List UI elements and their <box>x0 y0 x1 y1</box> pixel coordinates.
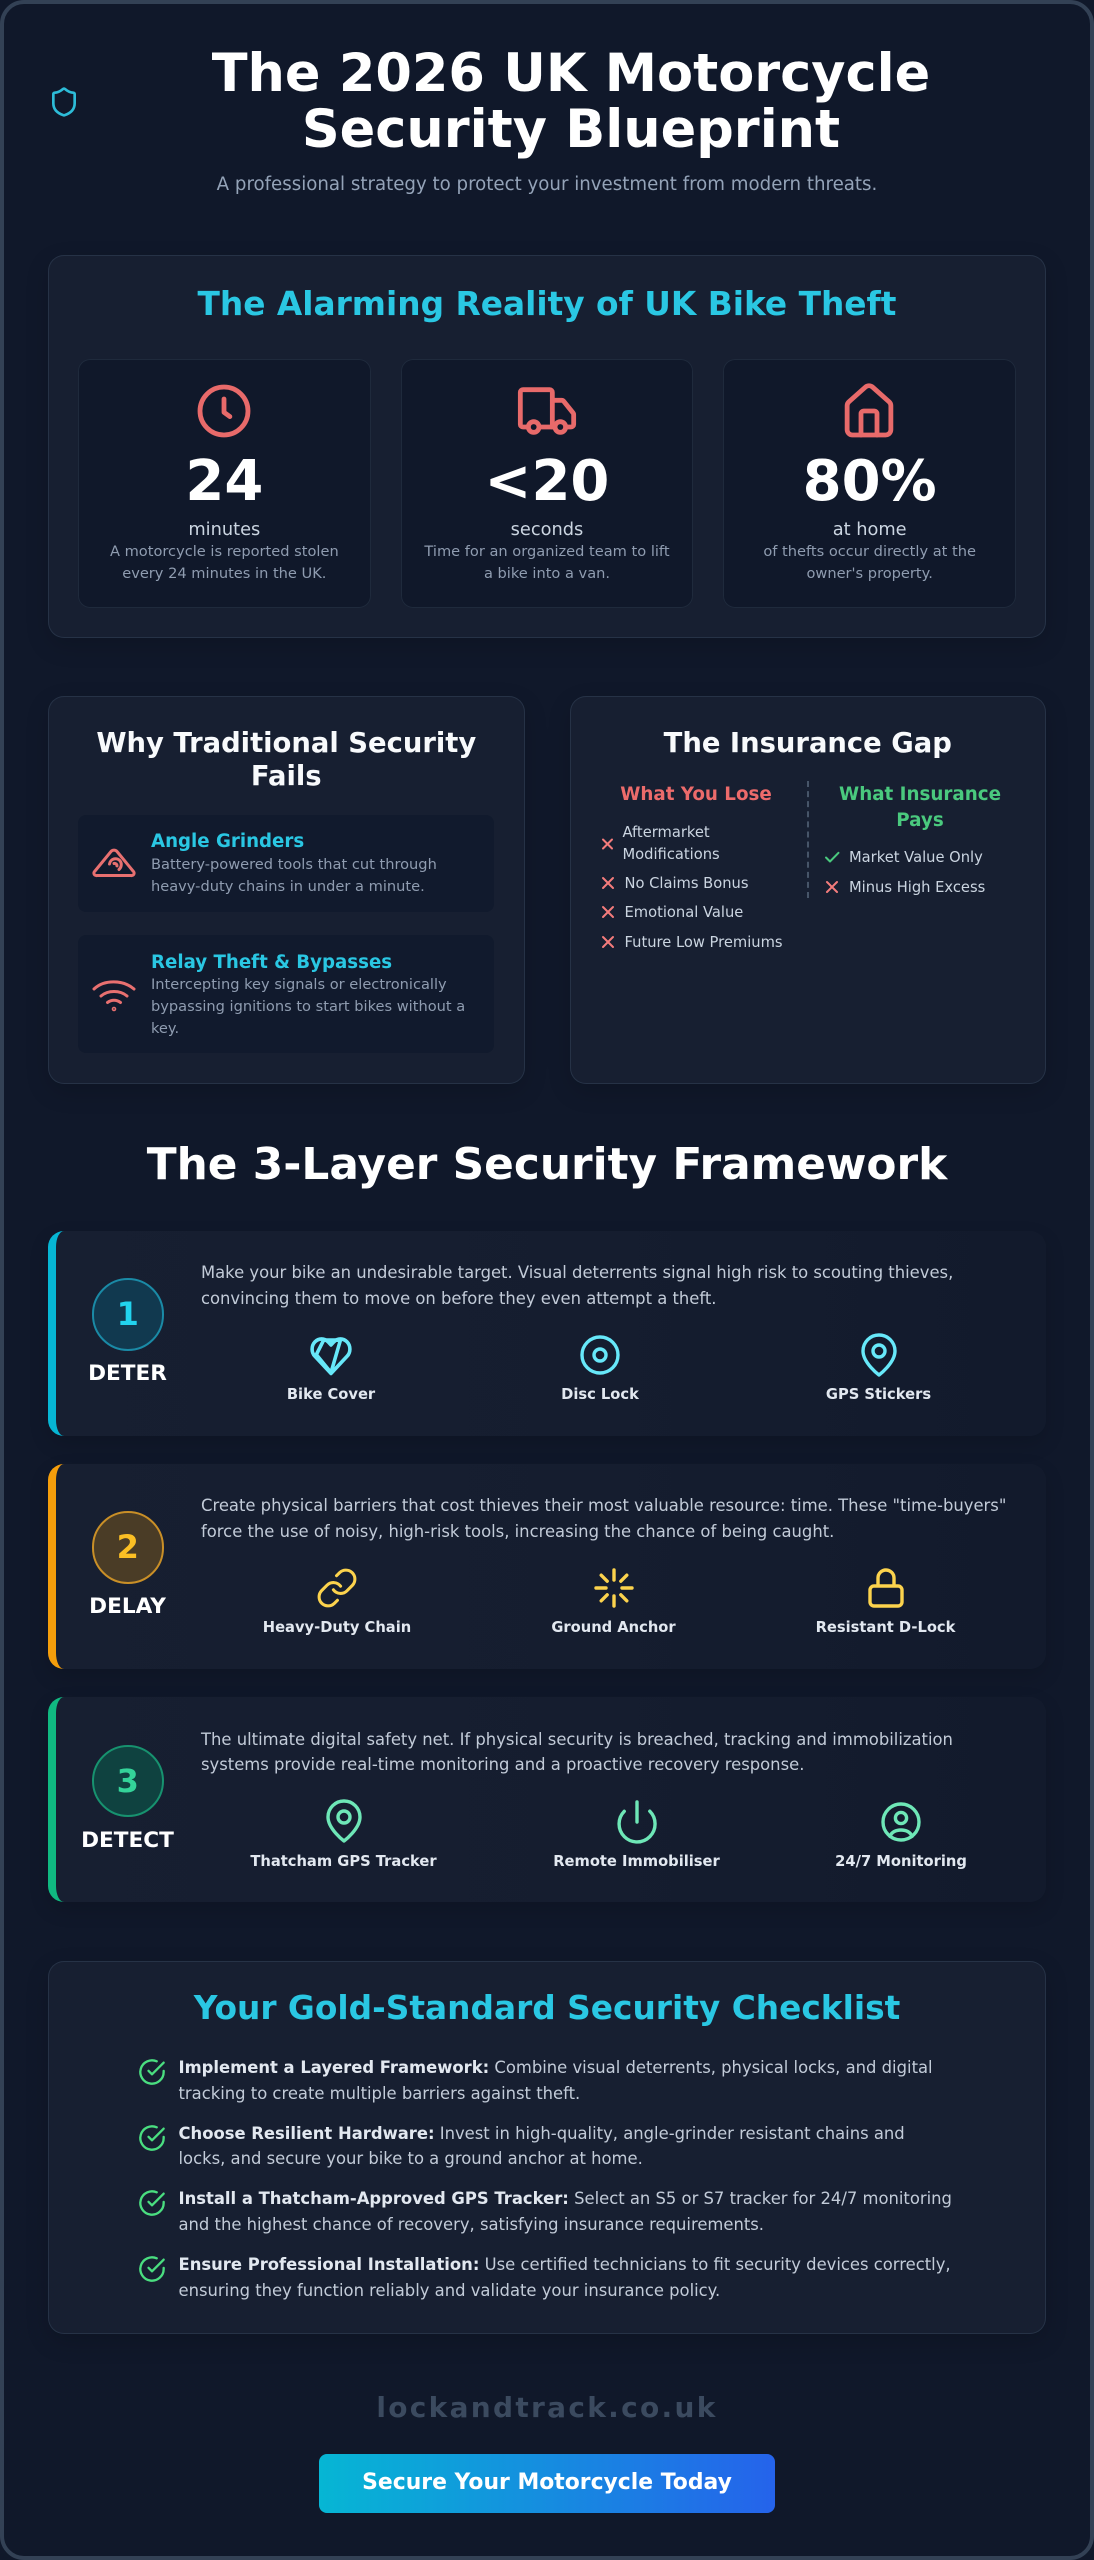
caption: resistant d-lock: Resistant D-Lock <box>816 1619 955 1636</box>
threat card: angle grinders <box>78 815 494 912</box>
icon: cross <box>826 881 838 893</box>
column: what insurance pays <box>825 784 1001 896</box>
list item: minus high excess: Minus High Excess <box>849 878 985 896</box>
stat card: 80% at home <box>723 359 1016 608</box>
number badge 3: 3 <box>117 1762 139 1800</box>
description <box>201 1496 1006 1541</box>
list item: market value only: Market Value Only <box>849 849 983 866</box>
icon: check circle <box>139 2059 165 2085</box>
description: convincing them to move on before they even attempt a theft. <box>201 1289 716 1308</box>
caption: disc lock: Disc Lock <box>561 1386 639 1403</box>
subheading: what insurance pays: What Insurance <box>839 784 1001 805</box>
heading: why traditional security fails: Fails <box>251 761 322 792</box>
icon: monitoring user <box>881 1802 921 1842</box>
subheading: what insurance pays: Pays <box>896 810 944 831</box>
icon: check circle <box>139 2125 165 2151</box>
icon: bike cover <box>310 1337 352 1376</box>
caption: ground anchor: Ground Anchor <box>551 1619 676 1636</box>
description: force the use of noisy, high-risk tools, increasing the chance of being caught. <box>201 1522 834 1541</box>
list item: emotional value: Emotional Value <box>624 904 743 921</box>
description: The ultimate digital safety net. If physical security is breached, tracking and immobilization <box>201 1730 953 1748</box>
icon: cross <box>602 877 614 889</box>
list item: aftermarket modifications: Modifications <box>622 846 720 863</box>
stat card: 24 minutes: 24 <box>185 449 263 514</box>
number badge 3 <box>92 1744 164 1817</box>
heading: insurance gap: The Insurance Gap <box>664 728 952 759</box>
heading: alarming reality: The Alarming Reality of UK Bike Theft <box>198 285 896 323</box>
icon: disc lock <box>580 1335 620 1375</box>
threat card: angle grinders: Battery-powered tools that cut through <box>151 856 437 873</box>
icon: ground anchor <box>594 1568 634 1608</box>
panel: the insurance gap <box>570 696 1046 1084</box>
stat card: 80% at home: owner's property. <box>806 565 933 582</box>
checklist item 3: and the highest chance of recovery, satisfying insurance requirements. <box>178 2215 764 2234</box>
checklist item 2: locks, and secure your bike to a ground anchor at home. <box>178 2149 643 2168</box>
subtitle: A professional strategy to protect your investment from modern threats. <box>217 174 877 195</box>
title <box>212 43 930 160</box>
threat card: relay theft: Intercepting key signals or electronically <box>151 976 447 993</box>
icon: d-lock <box>868 1568 904 1608</box>
panel: gold-standard checklist <box>48 1961 1046 2334</box>
heading: 3-layer framework: The 3-Layer Security Framework <box>147 1139 947 1190</box>
icon: chain link <box>318 1568 356 1608</box>
icon: gps sticker pin <box>861 1333 897 1377</box>
list item: future low premiums: Future Low Premiums <box>624 934 783 950</box>
panel: alarming reality <box>48 255 1046 638</box>
checklist item 3 <box>139 2189 952 2234</box>
dashed divider <box>807 781 809 898</box>
threat card: relay theft: Relay Theft & Bypasses <box>151 952 392 972</box>
list item: no claims bonus: No Claims Bonus <box>624 875 749 892</box>
threat card: angle grinders: heavy-duty chains in under a minute. <box>151 878 425 895</box>
caption: heavy-duty chain: Heavy-Duty Chain <box>263 1619 411 1636</box>
title: The 2026 UK Motorcycle <box>212 43 930 104</box>
checklist item 1: Implement a Layered Framework: Combine visual deterrents, physical locks, and digital <box>178 2058 933 2077</box>
stat card: 80% at home: at home <box>833 519 907 540</box>
stat card: under 20 seconds <box>401 359 693 608</box>
icon: clock <box>198 384 250 438</box>
stat card: 24 minutes: every 24 minutes in the UK. <box>122 565 326 582</box>
checklist item 1: tracking to create multiple barriers against theft. <box>178 2084 580 2103</box>
label: detect: DETECT <box>81 1828 174 1852</box>
layer 2: delay <box>48 1464 1046 1668</box>
checklist item 4: ensuring they function reliably and validate your insurance policy. <box>178 2281 720 2300</box>
threat card: relay theft: key. <box>151 1020 179 1037</box>
number badge 1: 1 <box>117 1295 139 1333</box>
checklist item 4: Ensure Professional Installation: Use certified technicians to fit security devices correctly, <box>178 2255 951 2274</box>
stat card: 80% at home: 80% <box>803 449 937 514</box>
caption: bike cover: Bike Cover <box>287 1386 375 1403</box>
icon: cross <box>602 838 613 850</box>
stat card: under 20 seconds: <20 <box>485 449 609 514</box>
description <box>201 1263 953 1308</box>
layer 1: deter <box>48 1231 1046 1436</box>
panel: why traditional security fails <box>48 696 524 1084</box>
call to action button <box>319 2454 775 2512</box>
number badge 2: 2 <box>117 1528 139 1566</box>
checklist item 1 <box>139 2058 933 2103</box>
icon: wifi signal <box>92 980 136 1012</box>
caption: thatcham gps tracker: Thatcham GPS Tracker <box>250 1853 437 1870</box>
icon: truck <box>518 387 576 435</box>
layer 3: detect <box>48 1697 1046 1902</box>
icon: power <box>617 1800 657 1844</box>
caption: remote immobiliser: Remote Immobiliser <box>553 1853 720 1870</box>
icon: check <box>825 852 840 862</box>
list item: aftermarket modifications <box>622 824 720 863</box>
label: deter: DETER <box>88 1360 167 1386</box>
heading: why traditional security fails <box>96 728 476 792</box>
description: Create physical barriers that cost thieves their most valuable resource: time. These "time-buyers" <box>201 1496 1006 1515</box>
stat card: 24 minutes: minutes <box>188 519 260 540</box>
checklist item 2 <box>139 2124 905 2168</box>
threat card: angle grinders: Angle Grinders <box>151 831 304 852</box>
stat card: under 20 seconds: Time for an organized team to lift <box>424 543 670 560</box>
checklist item 4 <box>139 2255 951 2300</box>
caption: 24/7 monitoring: 24/7 Monitoring <box>835 1853 967 1870</box>
threat card: relay theft <box>78 934 494 1052</box>
footer website: lockandtrack.co.uk <box>376 2391 718 2424</box>
label: delay: DELAY <box>89 1594 166 1619</box>
subheading: what insurance pays <box>839 784 1001 831</box>
stat card: under 20 seconds: a bike into a van. <box>484 565 610 582</box>
subheading: what you lose: What You Lose <box>620 784 772 805</box>
stat card: 24 minutes <box>78 359 371 608</box>
number badge 1 <box>92 1278 164 1350</box>
icon: cross <box>602 936 614 948</box>
icon: check circle <box>139 2256 165 2282</box>
stat card: 24 minutes: A motorcycle is reported stolen <box>110 543 339 560</box>
title: Security Blueprint <box>302 98 840 160</box>
icon: gps tracker pin <box>326 1799 362 1843</box>
description <box>200 1730 953 1774</box>
caption: gps stickers: GPS Stickers <box>826 1386 931 1403</box>
heading: checklist: Your Gold-Standard Security Checklist <box>194 1988 900 2026</box>
column: what you lose <box>602 784 783 950</box>
icon: shield <box>52 87 76 117</box>
icon: angle grinder <box>92 848 136 878</box>
threat card: relay theft: bypassing ignitions to start bikes without a <box>151 998 465 1015</box>
icon: check circle <box>139 2190 165 2216</box>
icon: cross <box>602 906 614 918</box>
stat card: under 20 seconds: seconds <box>511 519 583 540</box>
stat card: 80% at home: of thefts occur directly at the <box>763 543 976 560</box>
checklist item 2: Choose Resilient Hardware: Invest in high-quality, angle-grinder resistant chains and <box>178 2124 905 2143</box>
checklist item 3: Install a Thatcham-Approved GPS Tracker: Select an S5 or S7 tracker for 24/7 monitoring <box>178 2189 952 2208</box>
call to action button: Secure Your Motorcycle Today <box>362 2470 732 2495</box>
list item: aftermarket modifications: Aftermarket <box>622 824 710 841</box>
description: systems provide real-time monitoring and a proactive recovery response. <box>201 1755 804 1774</box>
icon: house <box>844 383 894 438</box>
description: Make your bike an undesirable target. Visual deterrents signal high risk to scouting thieves, <box>201 1263 953 1282</box>
heading: why traditional security fails: Why Traditional Security <box>96 728 476 759</box>
number badge 2 <box>92 1511 164 1584</box>
